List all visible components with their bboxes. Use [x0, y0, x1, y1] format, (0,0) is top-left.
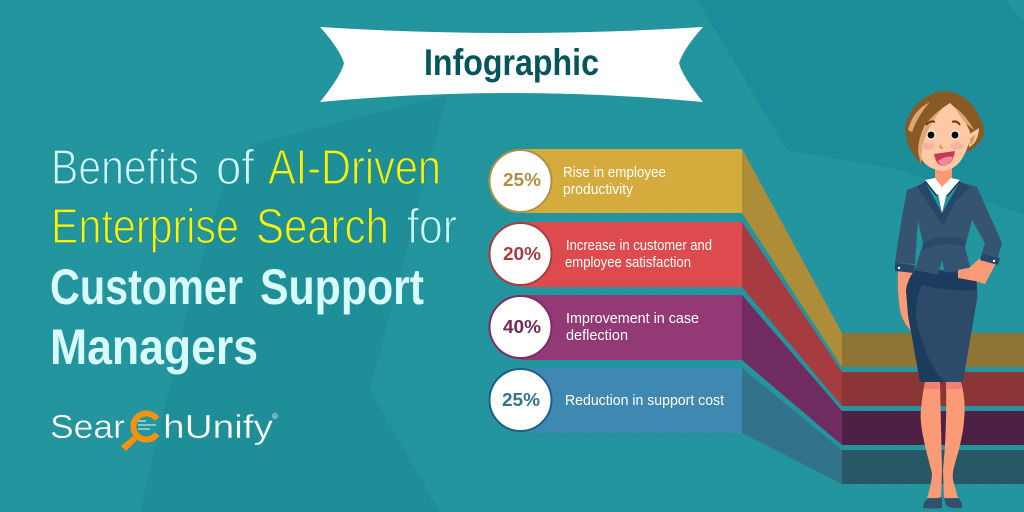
logo: SearchUnify [50, 408, 278, 451]
title: Search [256, 200, 389, 254]
brows [926, 121, 960, 125]
bar: 40% case deflection [490, 295, 842, 445]
hem shadow [924, 382, 962, 389]
title: of [216, 141, 254, 195]
jacket [895, 182, 1002, 275]
logo: SearchUnify: hUnify [163, 408, 274, 445]
hand on hip [958, 258, 996, 284]
hair highlights [908, 102, 974, 164]
title: Enterprise [51, 200, 239, 254]
skirt [906, 270, 977, 382]
bar: 40% case deflection: 40% [503, 317, 541, 337]
collar [925, 178, 960, 195]
bar: 20% satisfaction: 20% [503, 244, 541, 264]
bar: 20% satisfaction: Increase in customer and [566, 237, 712, 254]
bar: 40% case deflection: Improvement in case [566, 310, 699, 327]
bar: 25% support cost: Reduction in support cost [565, 392, 725, 409]
waist shading [923, 237, 965, 250]
skirt shadow [906, 268, 977, 382]
ear [968, 128, 979, 147]
cuffs [895, 253, 1000, 273]
mouth [934, 151, 955, 166]
bar: 25% productivity: productivity [563, 181, 633, 198]
title: Support [260, 259, 424, 315]
title: for [407, 200, 457, 254]
logo: SearchUnify: Sear [50, 408, 125, 445]
left arm and hand [898, 270, 913, 333]
title: Managers [50, 319, 258, 375]
hair [905, 91, 984, 165]
character: businesswoman [895, 91, 1002, 508]
icon: magnifier [121, 414, 157, 451]
shoes [923, 497, 962, 508]
logo: SearchUnify: ® [272, 412, 278, 421]
bar: 20% satisfaction: employee satisfaction [565, 254, 691, 271]
cheeks [921, 142, 935, 150]
legs [921, 382, 965, 498]
stair strips [842, 333, 1024, 484]
bar: 40% case deflection: deflection [566, 327, 628, 344]
bar: 25% productivity: Rise in employee [563, 164, 666, 181]
bar: 25% support cost [490, 368, 842, 484]
bar: 20% satisfaction [490, 222, 842, 406]
lapels [917, 182, 970, 226]
title: AI-Driven [268, 141, 441, 195]
bar: 25% productivity [490, 149, 842, 367]
bar: 25% support cost: 25% [502, 390, 540, 410]
eyes [927, 131, 935, 139]
title [50, 141, 457, 375]
bar: 25% productivity: 25% [503, 170, 541, 190]
neck [935, 165, 952, 192]
face [919, 103, 970, 171]
banner: Infographic [320, 27, 703, 102]
shirt [937, 188, 948, 213]
title: Benefits [51, 141, 199, 195]
title: Customer [50, 259, 243, 315]
banner heading: Infographic [424, 42, 599, 83]
nose [939, 144, 943, 149]
